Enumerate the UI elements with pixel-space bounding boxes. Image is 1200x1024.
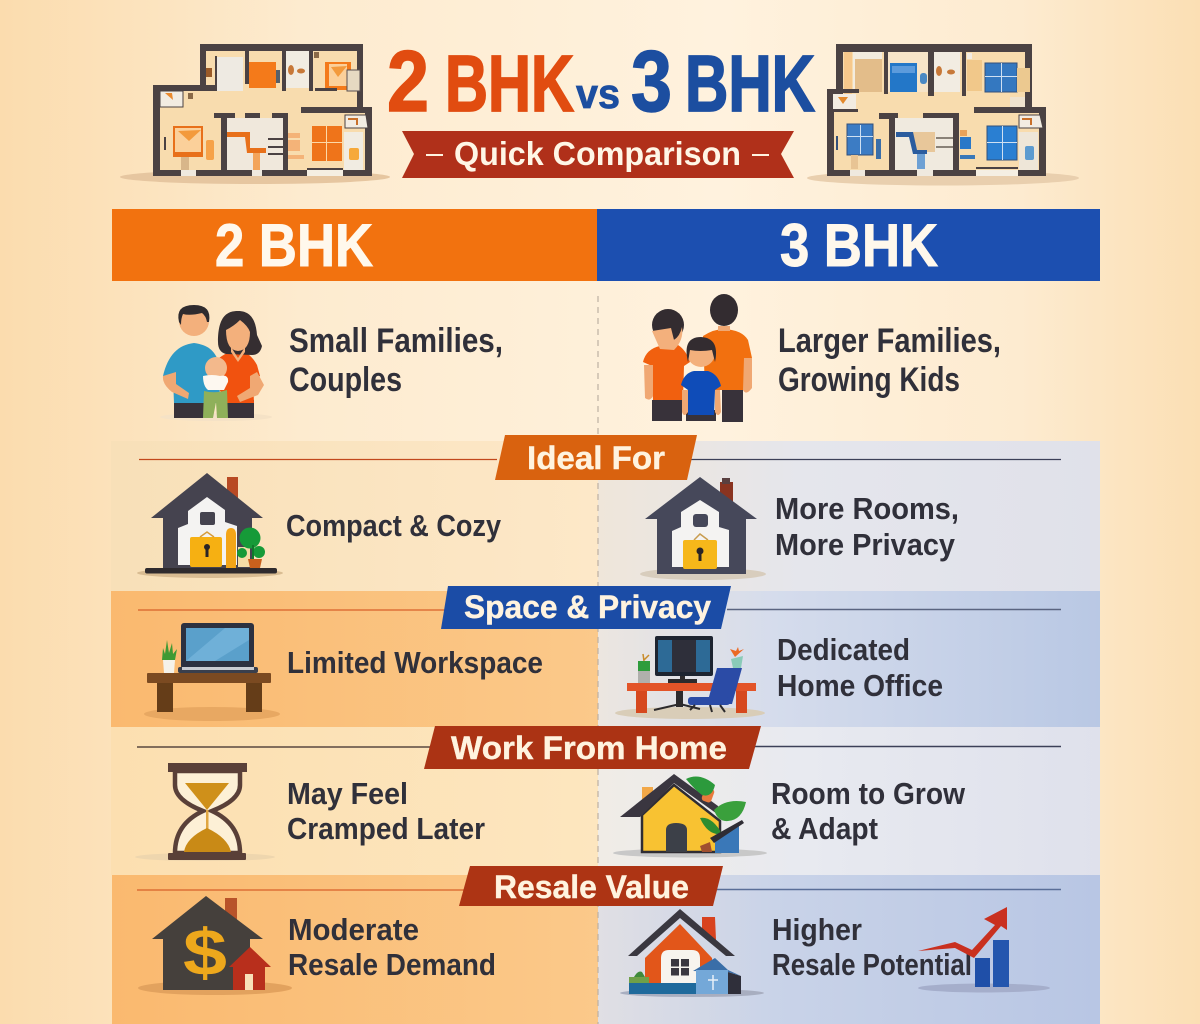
- row 2 right: text: More Rooms,: [775, 491, 959, 526]
- row 3 right: text: [777, 632, 943, 703]
- row 1 right: larger family icon: [643, 294, 752, 422]
- row 3 right: text: Dedicated: [777, 632, 910, 667]
- row 5 right: family house icon: [620, 909, 764, 997]
- section label: Ideal For: Ideal For: [527, 440, 665, 476]
- title: BHK: [445, 39, 574, 128]
- section label: Space & Privacy: Space & Privacy: [464, 589, 711, 625]
- row 5 left: house with dollar icon: $: [183, 915, 227, 989]
- row 2 right: text: [775, 491, 959, 562]
- row 5 right: growth chart icon: [918, 907, 1050, 992]
- row 1 right: text: Growing Kids: [778, 361, 960, 399]
- row 3 left: text: Limited Workspace: [287, 645, 543, 680]
- floor plan: 2 BHK: [120, 44, 390, 184]
- row 3 right: text: Home Office: [777, 668, 943, 703]
- title: [387, 34, 815, 130]
- row 1 left: small family icon: [160, 305, 272, 421]
- row 4 right: text: Room to Grow: [771, 776, 966, 811]
- section label: Resale Value: Resale Value: [494, 869, 689, 905]
- row 4 right: text: & Adapt: [771, 811, 878, 846]
- row 4 right: text: [771, 776, 966, 846]
- row 1 left: text: Couples: [289, 361, 402, 399]
- row 2 left: text: Compact & Cozy: [286, 508, 502, 543]
- row 5 left: text: [288, 912, 496, 982]
- row 1 right: text: Larger Families,: [778, 322, 1001, 360]
- section label: Resale Value: [459, 866, 723, 906]
- row 4 left: text: May Feel: [287, 776, 408, 811]
- header: 3 BHK: [597, 209, 1100, 281]
- row 3 left: desk with laptop icon: [144, 623, 280, 721]
- row 1 left: text: Small Families,: [289, 322, 503, 360]
- row 4 left: text: [287, 776, 485, 846]
- header: 2 BHK: [112, 209, 597, 281]
- subtitle ribbon: Quick Comparison: [454, 135, 741, 172]
- title: 2: [387, 34, 429, 130]
- section label: Work From Home: Work From Home: [451, 730, 727, 766]
- row 5 right: text: [772, 912, 972, 982]
- header: 2 BHK: 2 BHK: [215, 212, 373, 279]
- row bands: 2 BHK column: [111, 441, 598, 1024]
- section label: Ideal For: [495, 435, 697, 480]
- row 2 right: text: More Privacy: [775, 527, 956, 562]
- subtitle ribbon: [402, 131, 794, 178]
- row 3 right: home office icon: [615, 636, 765, 719]
- row 1 right: text: [778, 322, 1001, 399]
- row 5 left: house with dollar icon: [138, 896, 292, 995]
- row 1 left: text: [289, 322, 503, 399]
- row 5 right: text: Higher: [772, 912, 862, 947]
- row 5 right: text: Resale Potential: [772, 947, 972, 982]
- row 4 left: hourglass icon: [135, 763, 275, 861]
- header: 3 BHK: 3 BHK: [780, 212, 938, 279]
- title: vs: [576, 70, 620, 117]
- floor plan: 3 BHK: [807, 44, 1079, 186]
- row bands: 3 BHK column: [598, 441, 1100, 1024]
- section label: Work From Home: [424, 726, 761, 769]
- title: 3: [631, 34, 672, 130]
- row 5 left: text: Resale Demand: [288, 947, 496, 982]
- title: BHK: [685, 39, 815, 128]
- row 4 left: text: Cramped Later: [287, 811, 485, 846]
- row 4 right: growing house icon: [613, 774, 767, 858]
- row 2 right: house with lock icon: [640, 477, 766, 580]
- row 2 left: compact house icon: [137, 473, 283, 578]
- row 5 left: text: Moderate: [288, 912, 419, 947]
